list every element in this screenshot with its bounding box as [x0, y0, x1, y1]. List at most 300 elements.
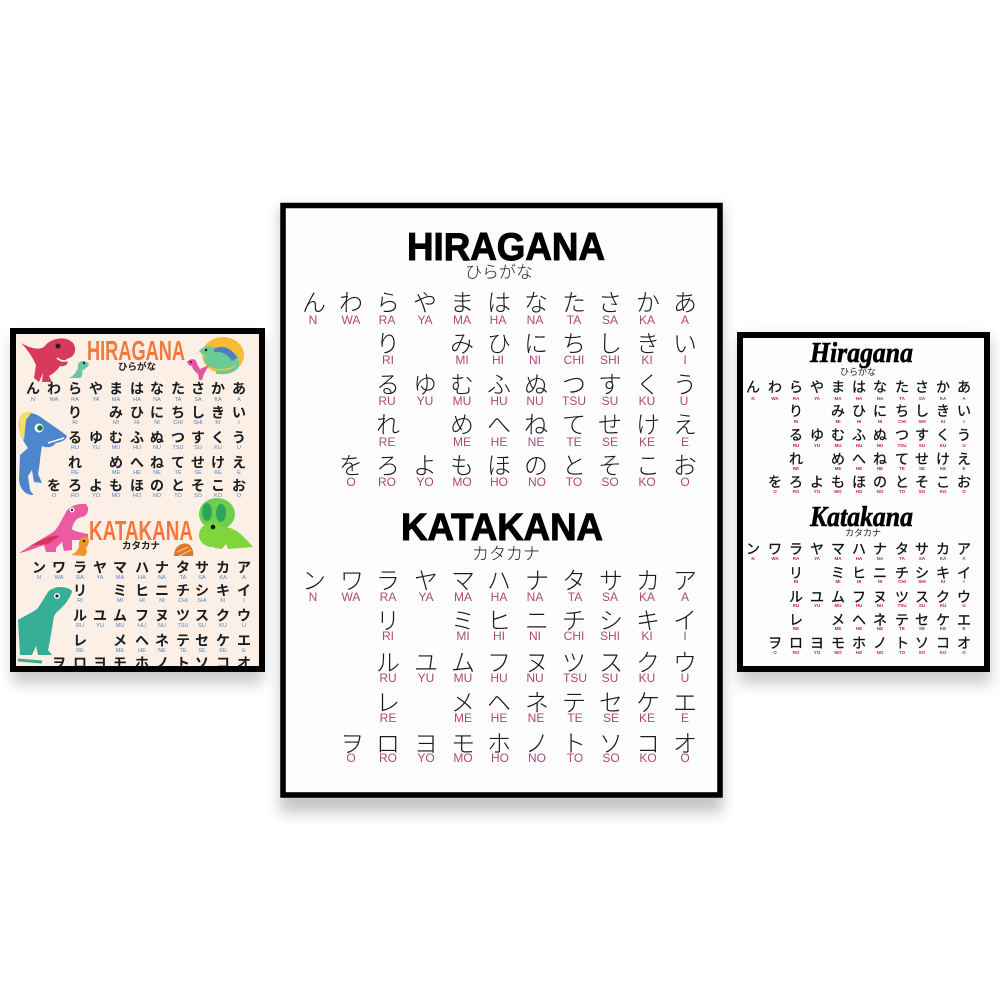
- katakana rows: NA: [527, 590, 543, 604]
- hiragana rows: SO: [194, 493, 203, 499]
- katakana rows: YA: [418, 590, 434, 604]
- katakana rows: KI: [941, 579, 945, 584]
- katakana rows: I: [963, 579, 965, 584]
- hiragana rows: NI: [878, 419, 882, 424]
- hiragana rows: れめへねてせけえ: [68, 454, 246, 470]
- katakana rows: レメヘネテセケエ: [376, 690, 697, 717]
- katakana rows: NO: [877, 650, 884, 655]
- katakana rows: KA: [219, 575, 227, 581]
- hiragana rows: HI: [492, 353, 504, 367]
- katakana rows: MI: [456, 629, 470, 643]
- katakana rows: SA: [198, 575, 206, 581]
- katakana rows: KA: [639, 590, 655, 604]
- hiragana rows: A: [681, 313, 689, 327]
- hiragana rows: NO: [528, 475, 546, 489]
- hiragana rows: YA: [417, 313, 433, 327]
- title: KATAKANA: KATAKANA: [401, 507, 603, 549]
- katakana rows: MI: [836, 579, 840, 584]
- hiragana rows: ME: [835, 466, 841, 471]
- hiragana rows: HE: [856, 466, 862, 471]
- hiragana rows: KE: [940, 466, 946, 471]
- katakana rows: KE: [639, 711, 655, 725]
- title: HIRAGANA orange: HIRAGANA: [87, 335, 185, 366]
- katakana rows: ME: [835, 626, 841, 631]
- katakana rows: RU: [76, 623, 84, 629]
- hiragana rows: んわらやまはなたさかあ: [302, 290, 697, 317]
- hiragana rows: NU: [877, 443, 883, 448]
- katakana rows: RA: [380, 590, 396, 604]
- subtitle: katakana: カタカナ: [845, 528, 881, 538]
- katakana rows: SO: [602, 751, 620, 765]
- hiragana rows: YO: [92, 493, 101, 499]
- hiragana rows: SA: [602, 313, 618, 327]
- hiragana rows: YU: [417, 394, 433, 408]
- katakana rows: NE: [158, 648, 166, 654]
- katakana rows: CHI: [898, 579, 906, 584]
- katakana rows: KU: [940, 603, 946, 608]
- katakana rows: ME: [454, 711, 472, 725]
- hiragana rows: NA: [527, 313, 543, 327]
- katakana rows: RU: [793, 603, 799, 608]
- katakana rows: A: [242, 575, 246, 581]
- hiragana rows: I: [238, 420, 240, 426]
- hiragana rows: NO: [153, 493, 162, 499]
- katakana rows: リミヒニチシキイ: [376, 608, 697, 635]
- hiragana rows: TSU: [172, 445, 184, 451]
- hiragana rows: MA: [834, 396, 842, 401]
- katakana rows: SE: [198, 648, 206, 654]
- katakana rows: NU: [526, 671, 544, 685]
- hiragana rows: NU: [153, 445, 161, 451]
- hiragana rows: るゆむふぬつすくう: [376, 372, 697, 399]
- subtitle: hiragana: ひらがな: [840, 366, 876, 377]
- hiragana rows: SU: [194, 445, 202, 451]
- hiragana rows: TO: [174, 493, 182, 499]
- hiragana rows: HE: [133, 470, 141, 476]
- hiragana rows: YA: [814, 396, 821, 401]
- hiragana rows: U: [962, 443, 966, 448]
- katakana rows: NE: [877, 626, 883, 631]
- hiragana rows: N: [751, 396, 755, 401]
- hiragana rows: HE: [491, 435, 507, 449]
- katakana rows: RA: [793, 556, 800, 561]
- hiragana rows: HO: [490, 475, 508, 489]
- katakana rows: YA: [97, 575, 104, 581]
- hiragana rows: HU: [133, 445, 141, 451]
- hiragana rows: RA: [71, 397, 79, 403]
- katakana rows: リミヒニチシキイ: [73, 582, 251, 598]
- hiragana rows: HO: [856, 489, 863, 494]
- hiragana rows: SE: [602, 435, 618, 449]
- hiragana rows: KU: [214, 445, 222, 451]
- katakana rows: ヲロヨモホノトソコオ: [52, 655, 251, 671]
- katakana rows: レメヘネテセケエ: [73, 632, 251, 648]
- katakana rows: O: [962, 650, 966, 655]
- katakana rows: TA: [568, 590, 582, 604]
- hiragana rows: RI: [382, 353, 394, 367]
- hiragana rows: WA: [342, 313, 360, 327]
- hiragana rows: YA: [93, 397, 100, 403]
- hiragana rows: [746, 379, 971, 494]
- katakana rows: E: [962, 626, 966, 631]
- hiragana rows: O: [773, 489, 777, 494]
- katakana rows: RE: [793, 626, 799, 631]
- hiragana rows: SU: [919, 443, 925, 448]
- hiragana rows: ME: [112, 470, 120, 476]
- hiragana rows: O: [237, 493, 242, 499]
- hiragana rows: ME: [453, 435, 471, 449]
- hiragana rows: NU: [526, 394, 544, 408]
- katakana rows: HA: [138, 575, 146, 581]
- katakana rows: MA: [116, 575, 124, 581]
- hiragana rows: NE: [528, 435, 544, 449]
- katakana rows: MU: [116, 623, 124, 629]
- hiragana rows: SO: [919, 489, 926, 494]
- katakana rows: KI: [641, 629, 653, 643]
- hiragana rows: NA: [877, 396, 884, 401]
- katakana rows: I: [683, 629, 687, 643]
- hiragana rows: N: [309, 313, 317, 327]
- katakana rows: ンワラヤマハナタサカア: [746, 541, 971, 557]
- katakana rows: HA: [491, 590, 507, 604]
- katakana rows: U: [962, 603, 966, 608]
- hiragana rows: RA: [793, 396, 800, 401]
- katakana rows: U: [681, 671, 689, 685]
- katakana rows: WA: [771, 556, 779, 561]
- katakana rows: ンワラヤマハナタサカア: [32, 560, 251, 576]
- hiragana rows: RE: [379, 435, 395, 449]
- hiragana rows: TO: [899, 489, 906, 494]
- hiragana rows: んわらやまはなたさかあ: [26, 380, 246, 396]
- katakana rows: KE: [219, 648, 227, 654]
- hiragana rows: TE: [566, 435, 582, 449]
- katakana rows: KO: [639, 751, 657, 765]
- katakana rows: E: [681, 711, 689, 725]
- katakana rows: N: [751, 556, 755, 561]
- hiragana rows: A: [237, 397, 241, 403]
- hiragana rows: をろよもほのとそこお: [768, 474, 971, 490]
- hiragana rows: んわらやまはなたさかあ: [746, 379, 971, 395]
- katakana rows: KU: [639, 671, 655, 685]
- katakana rows: CHI: [564, 629, 584, 643]
- katakana rows: NE: [528, 711, 544, 725]
- hiragana rows: CHI: [173, 420, 183, 426]
- katakana rows: TE: [899, 626, 905, 631]
- hiragana rows: をろよもほのとそこお: [47, 478, 246, 494]
- katakana rows: E: [242, 648, 246, 654]
- katakana rows: ヲロヨモホノトソコオ: [768, 635, 971, 651]
- hiragana rows: SO: [601, 475, 619, 489]
- hiragana rows: E: [237, 470, 241, 476]
- katakana rows: SE: [919, 626, 925, 631]
- katakana rows: HI: [857, 579, 861, 584]
- katakana rows: HE: [491, 711, 507, 725]
- hiragana rows: MO: [834, 489, 842, 494]
- hiragana rows: O: [346, 475, 356, 489]
- katakana rows: NA: [877, 556, 884, 561]
- subtitle: katakana: カタカナ: [472, 544, 540, 564]
- icon: orange baby dinosaur: [71, 536, 89, 556]
- hiragana rows: N: [31, 397, 35, 403]
- hiragana rows: KA: [214, 397, 222, 403]
- katakana rows: HA: [856, 556, 863, 561]
- katakana rows: HI: [139, 598, 145, 604]
- katakana rows: A: [962, 556, 966, 561]
- katakana rows: NO: [528, 751, 546, 765]
- poster: plain large kana chart: [280, 206, 723, 813]
- hiragana rows: SHI: [918, 419, 926, 424]
- hiragana rows: SHI: [193, 420, 203, 426]
- hiragana rows: KU: [639, 394, 655, 408]
- hiragana rows: HA: [856, 396, 863, 401]
- katakana rows: SHI: [600, 629, 620, 643]
- subtitle: katakana: カタカナ: [122, 540, 160, 552]
- katakana rows: ME: [116, 648, 124, 654]
- hiragana rows: HU: [856, 443, 862, 448]
- hiragana rows: U: [237, 445, 241, 451]
- hiragana rows: KI: [641, 353, 653, 367]
- hiragana rows: E: [681, 435, 689, 449]
- hiragana rows: HI: [857, 419, 861, 424]
- hiragana rows: TSU: [898, 443, 906, 448]
- hiragana rows: りみひにちしきい: [789, 403, 971, 419]
- hiragana rows: SA: [194, 397, 202, 403]
- hiragana rows: RU: [793, 443, 799, 448]
- icon: green stegosaurus: [199, 337, 244, 373]
- katakana rows: TSU: [178, 623, 189, 629]
- hiragana rows: RO: [378, 475, 396, 489]
- katakana rows: SHI: [197, 598, 207, 604]
- katakana rows: RI: [77, 598, 83, 604]
- hiragana rows: MU: [453, 394, 471, 408]
- katakana rows: リミヒニチシキイ: [789, 565, 971, 581]
- hiragana rows: RE: [793, 466, 799, 471]
- katakana rows: A: [681, 590, 689, 604]
- title: HIRAGANA: HIRAGANA: [407, 226, 605, 269]
- hiragana rows: SU: [602, 394, 618, 408]
- hiragana rows: RU: [378, 394, 396, 408]
- hiragana rows: HO: [133, 493, 142, 499]
- katakana rows: RO: [379, 751, 397, 765]
- icon: blue raptor: [19, 412, 67, 495]
- hiragana rows: MI: [836, 419, 840, 424]
- katakana rows: MO: [834, 650, 842, 655]
- hiragana rows: KU: [940, 443, 946, 448]
- hiragana rows: RA: [379, 313, 395, 327]
- katakana rows: ルユムフヌツスクウ: [789, 589, 971, 605]
- katakana rows: SA: [602, 590, 618, 604]
- hiragana rows: るゆむふぬつすくう: [68, 430, 246, 446]
- katakana rows: MU: [834, 603, 842, 608]
- hiragana rows: [302, 290, 697, 489]
- katakana rows: TSU: [563, 671, 587, 685]
- katakana rows: TE: [567, 711, 583, 725]
- katakana rows: NI: [878, 579, 882, 584]
- katakana rows: MO: [453, 751, 473, 765]
- hiragana rows: KA: [639, 313, 655, 327]
- hiragana rows: TA: [175, 397, 182, 403]
- katakana rows: MA: [454, 590, 472, 604]
- hiragana rows: RO: [793, 489, 800, 494]
- hiragana rows: NI: [529, 353, 541, 367]
- katakana rows: SU: [602, 671, 618, 685]
- icon: orange shell: [174, 544, 193, 556]
- katakana rows: U: [242, 623, 246, 629]
- icon: teal dinosaur: [18, 587, 72, 662]
- hiragana rows: YU: [92, 445, 100, 451]
- katakana rows: TA: [899, 556, 906, 561]
- katakana rows: ンワラヤマハナタサカア: [302, 568, 697, 595]
- katakana rows: [32, 560, 251, 671]
- katakana rows: ルユムフヌツスクウ: [376, 650, 697, 677]
- katakana rows: TE: [179, 648, 187, 654]
- katakana rows: HU: [490, 671, 508, 685]
- hiragana rows: HA: [133, 397, 141, 403]
- hiragana rows: A: [962, 396, 966, 401]
- katakana rows: YU: [418, 671, 434, 685]
- katakana rows: NU: [877, 603, 883, 608]
- katakana rows: RI: [794, 579, 798, 584]
- icon: small pink dinosaur: [187, 359, 209, 380]
- hiragana rows: TO: [566, 475, 582, 489]
- hiragana rows: RO: [71, 493, 80, 499]
- hiragana rows: KO: [638, 475, 656, 489]
- hiragana rows: KA: [940, 396, 947, 401]
- katakana rows: RA: [76, 575, 84, 581]
- katakana rows: TO: [567, 751, 583, 765]
- katakana rows: YA: [814, 556, 821, 561]
- hiragana rows: HA: [490, 313, 506, 327]
- hiragana rows: RU: [71, 445, 79, 451]
- hiragana rows: O: [680, 475, 690, 489]
- katakana rows: HU: [856, 603, 862, 608]
- hiragana rows: MO: [452, 475, 472, 489]
- katakana rows: NU: [158, 623, 166, 629]
- katakana rows: O: [773, 650, 777, 655]
- hiragana rows: TE: [899, 466, 905, 471]
- hiragana rows: NE: [877, 466, 883, 471]
- katakana rows: TSU: [898, 603, 906, 608]
- katakana rows: MI: [117, 598, 124, 604]
- hiragana rows: KI: [215, 420, 221, 426]
- hiragana rows: SA: [919, 396, 926, 401]
- hiragana rows: U: [680, 394, 688, 408]
- katakana rows: MU: [454, 671, 472, 685]
- hiragana rows: RI: [72, 420, 78, 426]
- hiragana rows: MI: [113, 420, 120, 426]
- hiragana rows: HU: [490, 394, 508, 408]
- hiragana rows: SHI: [600, 353, 620, 367]
- hiragana rows: をろよもほのとそこお: [339, 453, 697, 480]
- hiragana rows: YU: [814, 443, 820, 448]
- hiragana rows: MA: [112, 397, 120, 403]
- hiragana rows: HI: [134, 420, 140, 426]
- hiragana rows: YO: [814, 489, 821, 494]
- hiragana rows: KO: [940, 489, 947, 494]
- hiragana rows: TE: [174, 470, 182, 476]
- icon: green triceratops: [199, 498, 253, 549]
- katakana rows: TA: [180, 575, 187, 581]
- katakana rows: KI: [220, 598, 226, 604]
- katakana rows: ヲロヨモホノトソコオ: [340, 731, 697, 758]
- hiragana rows: KO: [214, 493, 223, 499]
- katakana rows: RE: [76, 648, 84, 654]
- katakana rows: KE: [940, 626, 946, 631]
- hiragana rows: MI: [455, 353, 469, 367]
- subtitle: hiragana: ひらがな: [118, 361, 156, 373]
- hiragana rows: NI: [154, 420, 160, 426]
- katakana rows: [302, 568, 697, 765]
- hiragana rows: MO: [112, 493, 121, 499]
- hiragana rows: SE: [919, 466, 925, 471]
- hiragana rows: WA: [771, 396, 779, 401]
- katakana rows: SU: [919, 603, 925, 608]
- katakana rows: SU: [198, 623, 206, 629]
- katakana rows: HU: [138, 623, 146, 629]
- katakana rows: SA: [919, 556, 926, 561]
- hiragana rows: るゆむふぬつすくう: [789, 427, 971, 443]
- katakana rows: SE: [603, 711, 619, 725]
- hiragana rows: I: [963, 419, 965, 424]
- hiragana rows: MA: [453, 313, 471, 327]
- hiragana rows: RE: [71, 470, 79, 476]
- katakana rows: WA: [342, 590, 360, 604]
- hiragana rows: RI: [794, 419, 798, 424]
- hiragana rows: NA: [153, 397, 161, 403]
- hiragana rows: れめへねてせけえ: [376, 412, 697, 439]
- katakana rows: O: [680, 751, 690, 765]
- katakana rows: RI: [382, 629, 394, 643]
- katakana rows: SO: [919, 650, 926, 655]
- katakana rows: YO: [417, 751, 435, 765]
- hiragana rows: TA: [567, 313, 581, 327]
- icon: red t-rex: [21, 338, 75, 382]
- hiragana rows: [26, 380, 246, 499]
- katakana rows: HO: [491, 751, 509, 765]
- hiragana rows: O: [962, 489, 966, 494]
- katakana rows: ルユムフヌツスクウ: [73, 608, 251, 624]
- title: KATAKANA orange: KATAKANA: [89, 515, 193, 546]
- hiragana rows: CHI: [564, 353, 584, 367]
- hiragana rows: WA: [50, 397, 59, 403]
- katakana rows: KU: [219, 623, 227, 629]
- hiragana rows: TSU: [562, 394, 586, 408]
- katakana rows: レメヘネテセケエ: [789, 612, 971, 628]
- katakana rows: TO: [899, 650, 906, 655]
- katakana rows: HE: [138, 648, 146, 654]
- katakana rows: HE: [856, 626, 862, 631]
- katakana rows: N: [309, 590, 317, 604]
- katakana rows: SHI: [918, 579, 926, 584]
- hiragana rows: りみひにちしきい: [68, 404, 246, 420]
- katakana rows: I: [243, 598, 245, 604]
- katakana rows: O: [346, 751, 356, 765]
- katakana rows: N: [37, 575, 41, 581]
- hiragana rows: TA: [899, 396, 906, 401]
- katakana rows: YO: [814, 650, 821, 655]
- icon: pink brontosaurus: [19, 504, 88, 553]
- katakana rows: KO: [940, 650, 947, 655]
- katakana rows: RO: [793, 650, 800, 655]
- katakana rows: WA: [55, 575, 64, 581]
- katakana rows: RE: [380, 711, 396, 725]
- hiragana rows: NE: [153, 470, 161, 476]
- subtitle: hiragana: ひらがな: [465, 263, 533, 282]
- katakana rows: CHI: [178, 598, 188, 604]
- hiragana rows: E: [962, 466, 966, 471]
- hiragana rows: I: [683, 353, 687, 367]
- katakana rows: YU: [814, 603, 820, 608]
